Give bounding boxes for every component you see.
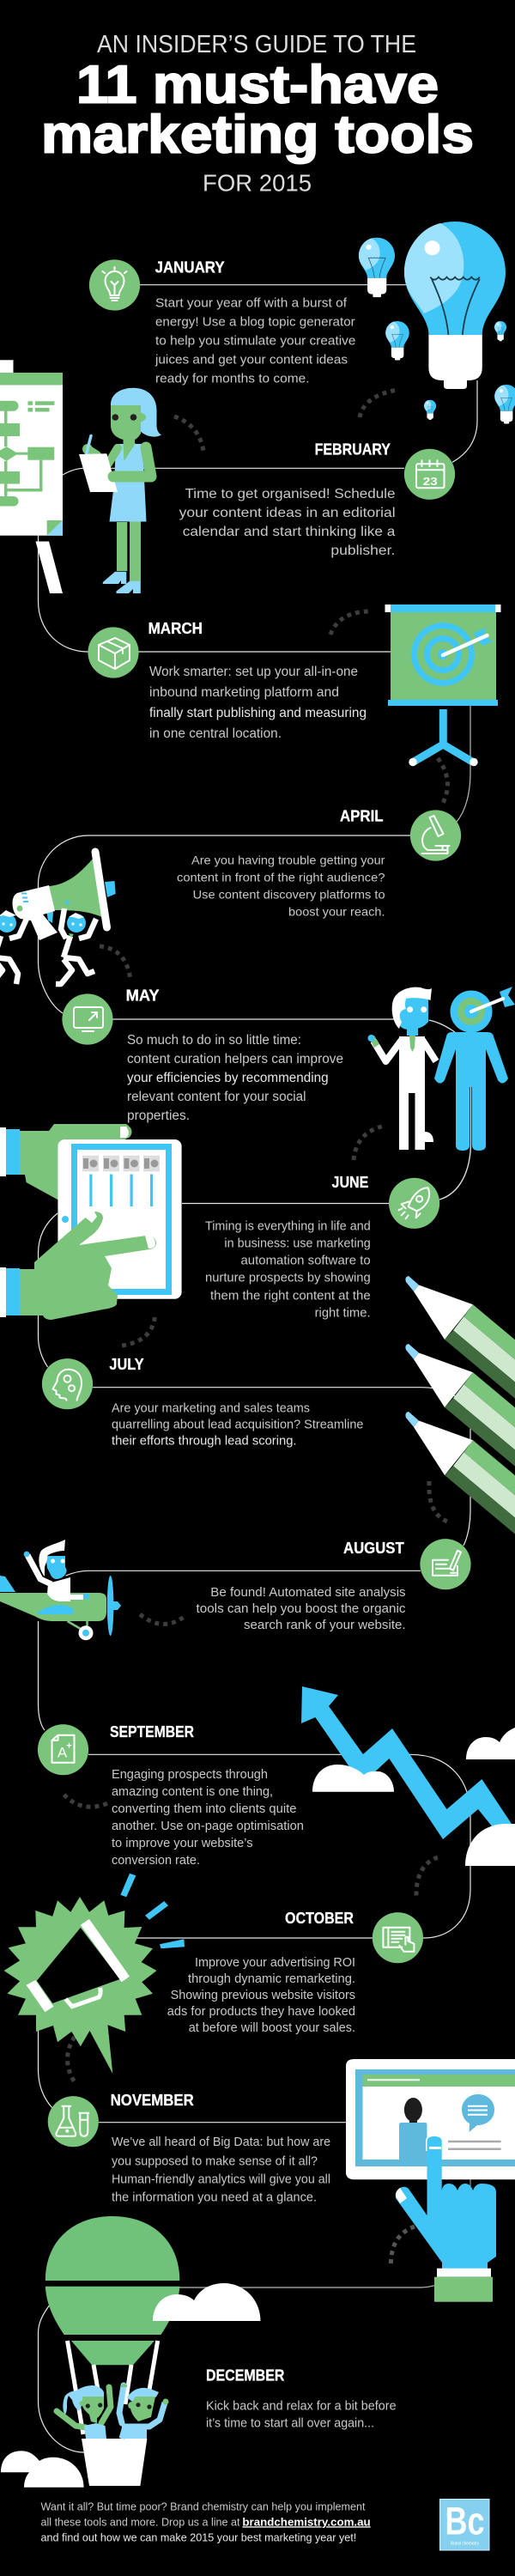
text: April: Use content discovery platforms to [193, 888, 385, 902]
icon: calendar: 23 [423, 475, 438, 488]
text: September [112, 1768, 304, 1868]
footer call to action: brandchemistry.com.au [242, 2515, 371, 2528]
text: November: you supposed to make sense of it all? [112, 2155, 318, 2169]
text: May: relevant content for your social [127, 1090, 306, 1104]
text: June: automation software to [240, 1254, 371, 1268]
icon: A+ document: + [66, 1741, 72, 1752]
text: May: content curation helpers can improve [127, 1052, 343, 1066]
title: 11 must-have [76, 55, 439, 114]
illustration: monitor with pointing hand [346, 2059, 515, 2302]
icon: monitor [62, 993, 113, 1045]
text: December: Kick back and relax for a bit before [206, 2400, 397, 2414]
footer call to action: all these tools and more. Drop us a line at [41, 2515, 240, 2528]
text: December: it’s time to start all over again... [206, 2417, 374, 2431]
icon: head with gears [42, 1358, 93, 1409]
text: September: another. Use on-page optimisation [112, 1820, 304, 1833]
illustration: rising zigzag arrow and clouds [301, 1686, 515, 1866]
illustration: light bulbs [359, 222, 515, 423]
text: April: content in front of the right audience? [177, 871, 385, 884]
text: February [179, 487, 396, 558]
text: October [167, 1956, 355, 2035]
panel: July [42, 1356, 364, 1448]
icon: A+ document: A [58, 1745, 68, 1761]
icon: touch document [373, 1912, 423, 1963]
text: May: your efficiencies by recommending [127, 1071, 329, 1085]
panel: March [88, 620, 367, 741]
text: November: We’ve all heard of Big Data: but how are [112, 2136, 330, 2149]
text: November: Human-friendly analytics will give you all [112, 2173, 330, 2187]
heading: September: SEPTEMBER [110, 1723, 194, 1741]
title: AN INSIDER’S GUIDE TO THE [97, 31, 416, 58]
text: January [154, 295, 355, 386]
text: January: Start your year off with a burst of [155, 295, 348, 310]
text: June: Timing is everything in life and [205, 1219, 371, 1234]
panel: December [206, 2366, 397, 2431]
title: marketing tools [41, 106, 474, 165]
text: March: finally start publishing and measuring [149, 706, 367, 720]
text: October: Improve your advertising ROI [195, 1956, 355, 1970]
panel: October [167, 1910, 423, 2035]
illustration: megaphone starburst [4, 1874, 185, 2074]
panel: January [89, 259, 355, 386]
heading: May: MAY [126, 987, 160, 1005]
text: November [112, 2136, 330, 2205]
panel: November [48, 2092, 330, 2205]
title [41, 31, 474, 197]
text: October: through dynamic remarketing. [188, 1972, 355, 1986]
icon: rocket [389, 1178, 439, 1229]
text: March: in one central location. [149, 726, 282, 741]
text: July: quarrelling about lead acquisition? Streamline [112, 1418, 364, 1431]
text: August: tools can help you boost the organic [196, 1602, 405, 1616]
logo: Brand chemistry: Bc [445, 2500, 484, 2543]
text: February: publisher. [330, 544, 395, 558]
icon: light bulb [89, 259, 140, 311]
panel: February [179, 440, 455, 558]
text: April: boost your reach. [288, 905, 385, 919]
text: September: converting them into clients quite [112, 1802, 297, 1816]
heading: July: JULY [109, 1356, 144, 1373]
text: May [127, 1033, 343, 1123]
illustration: flowchart board [0, 360, 63, 593]
panel: September [38, 1723, 304, 1868]
text: August: search rank of your website. [244, 1619, 406, 1632]
heading: August: AUGUST [343, 1540, 404, 1557]
panel: June [205, 1174, 439, 1320]
text: June: right time. [315, 1305, 371, 1320]
illustration: three pencils [405, 1276, 515, 1554]
text: December [206, 2400, 397, 2431]
text: October: ads for products they have looked [167, 2005, 355, 2019]
heading: April: APRIL [340, 808, 384, 825]
text: April: Are you having trouble getting your [191, 854, 385, 867]
text: January: to help you stimulate your creative [155, 333, 355, 348]
icon: box [88, 627, 139, 678]
panel: August [196, 1539, 471, 1632]
text: August [196, 1586, 406, 1632]
footer call to action: Want it all? But time poor? Brand chemistry can help you implement [41, 2500, 366, 2512]
text: March [149, 665, 367, 741]
icon: microscope [410, 810, 461, 861]
text: August: Be found! Automated site analysis [210, 1586, 406, 1600]
text: June: nurture prospects by showing [205, 1271, 371, 1285]
text: September: Engaging prospects through [112, 1768, 268, 1782]
heading: January: JANUARY [155, 259, 225, 276]
logo: Brand chemistry: Brand chemistry [451, 2541, 479, 2546]
text: June [205, 1219, 371, 1320]
footer call to action [41, 2500, 371, 2543]
icon: flask and test tube [48, 2096, 99, 2147]
heading: February: FEBRUARY [315, 440, 391, 458]
footer call to action: and find out how we can make 2015 your best marketing year yet! [41, 2530, 356, 2543]
heading: October: OCTOBER [285, 1910, 354, 1927]
text: October: Showing previous website visitors [171, 1989, 355, 2002]
heading: December: DECEMBER [206, 2366, 284, 2384]
text: October: at before will boost your sales. [189, 2021, 355, 2035]
text: March: Work smarter: set up your all-in-one [149, 665, 358, 679]
heading: June: JUNE [331, 1174, 368, 1191]
text: February: calendar and start thinking like a [183, 525, 396, 539]
illustration: man and target-head man [367, 987, 515, 1200]
icon: cheque and pen [420, 1539, 471, 1589]
illustration: target presentation board [385, 605, 501, 766]
illustration: woman with clipboard [79, 388, 161, 593]
illustration: pilot in plane [0, 1540, 121, 1640]
heading: March: MARCH [148, 620, 203, 637]
panel: May [62, 987, 343, 1123]
panel: April [177, 808, 461, 919]
text: June: in business: use marketing [224, 1236, 371, 1251]
illustration: megaphone and two people [0, 852, 116, 984]
illustration: hot air balloon [1, 2216, 261, 2488]
text: September: to improve your website’s [112, 1837, 253, 1850]
title: FOR 2015 [203, 170, 312, 197]
connector timeline [38, 285, 477, 2452]
text: April [177, 854, 385, 919]
text: May: So much to do in so little time: [127, 1033, 301, 1048]
text: February: your content ideas in an editorial [179, 506, 396, 520]
text: September: conversion rate. [112, 1854, 200, 1868]
text: February: Time to get organised! Schedule [185, 487, 396, 501]
text: January: ready for months to come. [155, 371, 309, 386]
heading: November: NOVEMBER [111, 2092, 194, 2109]
illustration: hands on tablet [0, 1124, 182, 1320]
text: June: them the right content at the [210, 1288, 371, 1303]
text: May: properties. [127, 1109, 190, 1123]
text: January: energy! Use a blog topic generator [155, 314, 355, 329]
text: July: Are your marketing and sales teams [112, 1401, 310, 1415]
text: March: inbound marketing platform and [149, 685, 339, 700]
text: September: amazing content is one thing, [112, 1785, 273, 1799]
icon: calendar [404, 449, 455, 500]
text: January: juices and get your content ideas [154, 352, 348, 367]
icon: A+ document [38, 1724, 88, 1775]
text: July [112, 1401, 364, 1448]
text: July: their efforts through lead scoring. [112, 1434, 297, 1448]
dotted arcs [64, 390, 450, 2265]
text: November: the information you need at a glance. [112, 2191, 317, 2205]
